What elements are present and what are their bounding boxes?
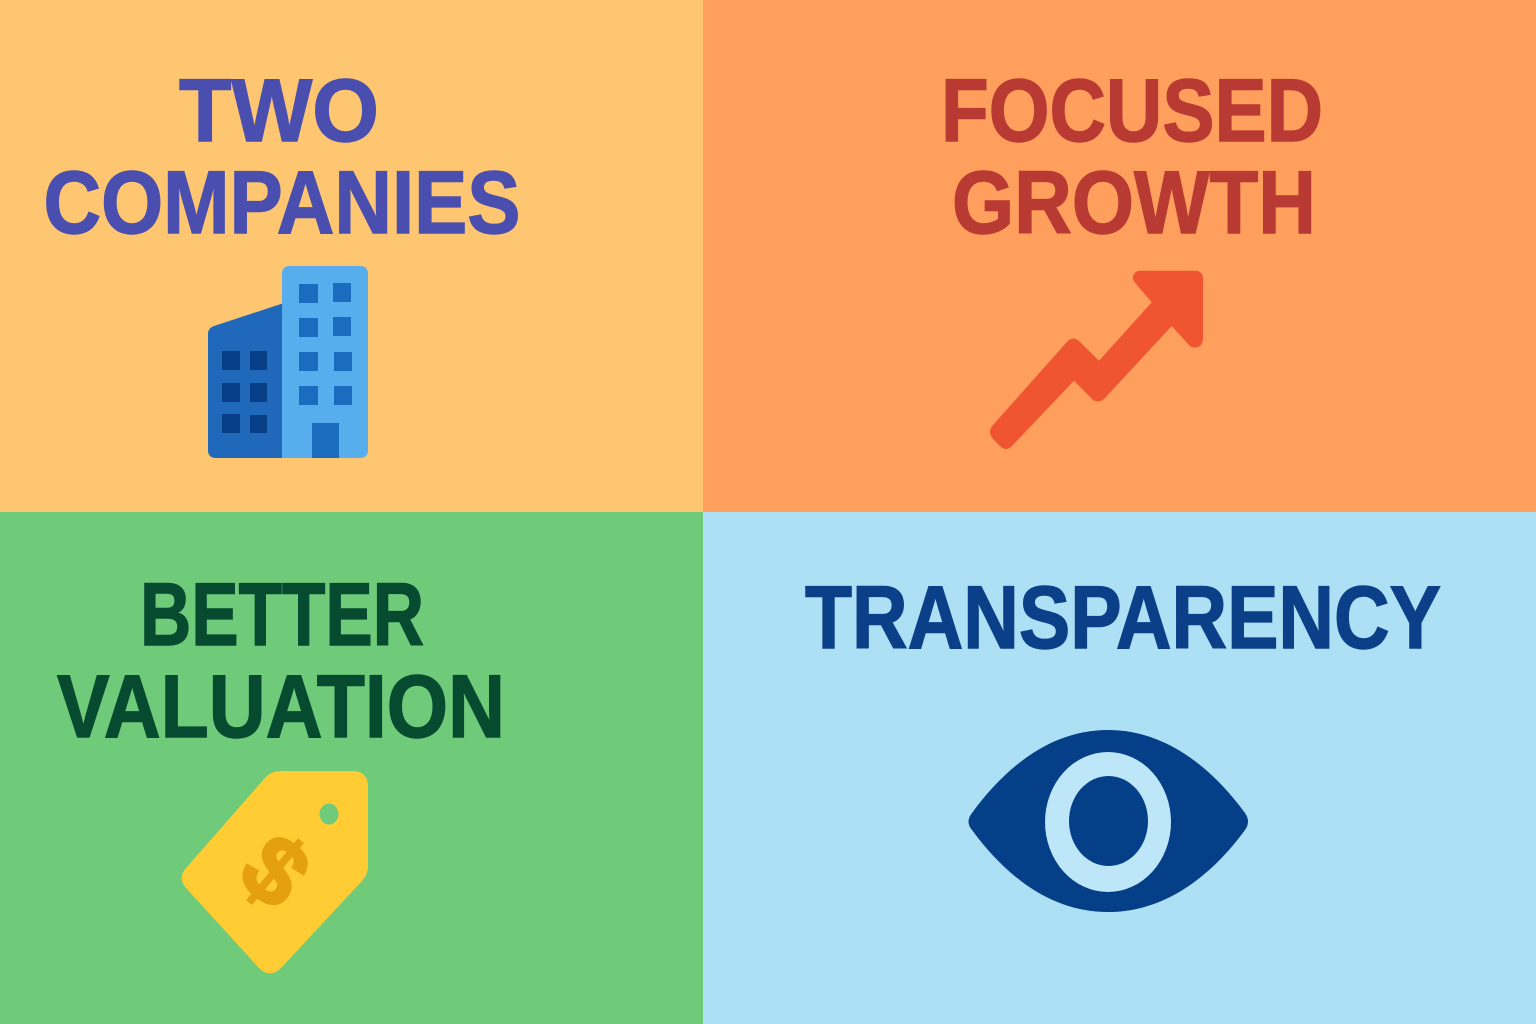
icon: office buildings <box>208 266 368 458</box>
heading: transparency: TRANSPARENCY <box>805 567 1441 667</box>
icon: eye <box>968 730 1248 912</box>
heading: focused growth: GROWTH <box>952 152 1316 252</box>
panel: transparency <box>703 512 1536 1024</box>
heading: two companies: COMPANIES <box>44 152 520 252</box>
heading: better valuation <box>57 564 505 756</box>
heading: better valuation: BETTER <box>140 564 424 664</box>
heading: focused growth: FOCUSED <box>941 60 1323 160</box>
dollar sign: $ <box>220 813 330 929</box>
panel: focused growth <box>703 0 1536 512</box>
heading: better valuation: VALUATION <box>57 656 505 756</box>
icon: price tag <box>182 771 368 974</box>
heading: two companies: TWO <box>179 60 379 160</box>
panel: two companies <box>0 0 703 512</box>
heading: focused growth <box>941 60 1323 252</box>
icon: growth arrow <box>990 271 1203 449</box>
heading: two companies <box>44 60 520 252</box>
panel: better valuation <box>0 512 703 1024</box>
